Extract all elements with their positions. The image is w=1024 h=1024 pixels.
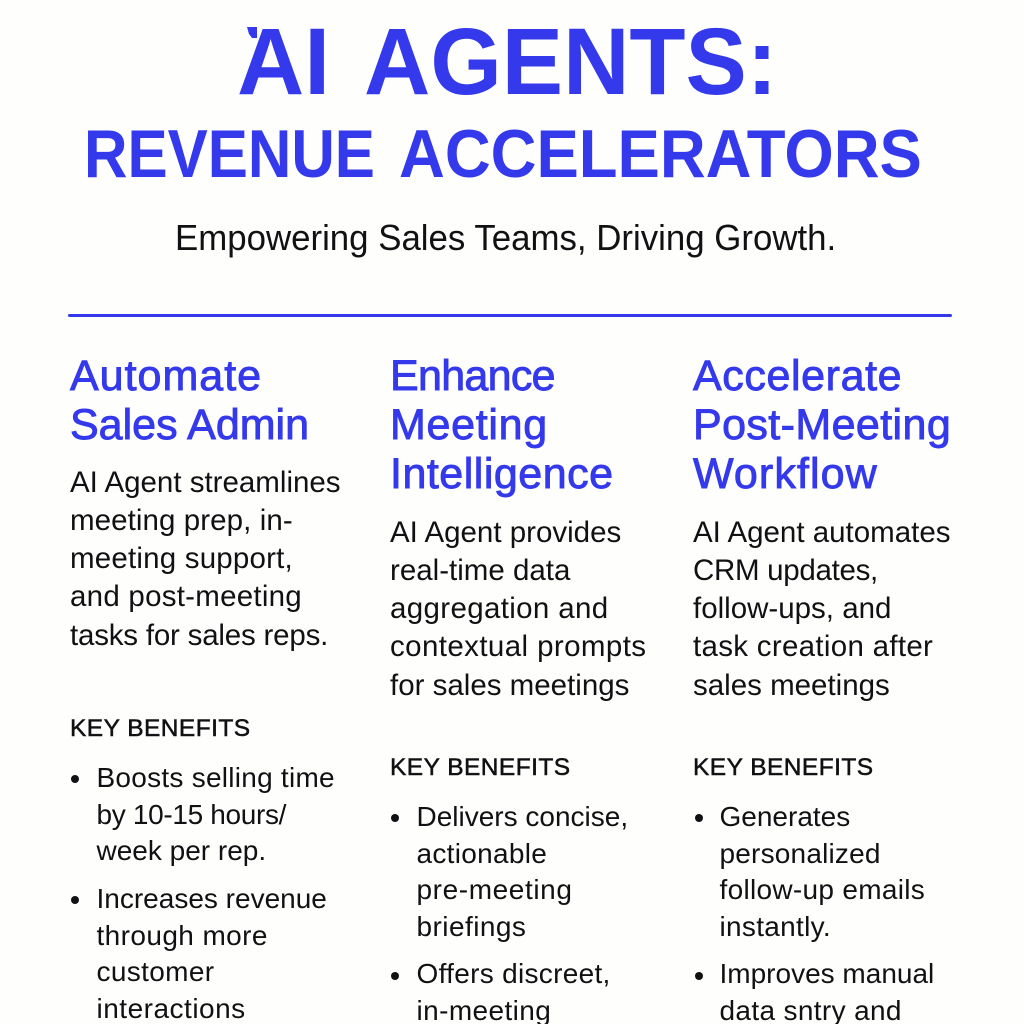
benefits list: Generates (720, 801, 850, 832)
benefits list: by 10-15 hours/ (96, 798, 286, 830)
text block: description: for sales meetings (390, 669, 629, 702)
text block: description: sales meetings (693, 669, 890, 702)
text block: description: aggregation and (390, 592, 608, 625)
benefits list: Improves manual (720, 958, 934, 989)
benefits list: follow-up emails (720, 874, 925, 905)
benefits list (695, 801, 934, 1024)
heading: automate sales admin: Automate (70, 352, 262, 400)
heading: key benefits: KEY BENEFITS (693, 754, 874, 781)
title: AI (237, 9, 330, 115)
heading: enhance meeting intelligence: Enhance (390, 352, 555, 400)
icon: accent mark on title (247, 27, 257, 38)
heading: automate sales admin (70, 352, 309, 449)
benefits list: actionable (416, 838, 547, 868)
heading: key benefits: KEY BENEFITS (70, 715, 251, 742)
text block: description: task creation after (693, 630, 933, 663)
text block: description (70, 466, 341, 652)
panel: accelerate post-meeting workflow (692, 352, 951, 1024)
heading: accelerate post-meeting workflow: Post-Meeting (693, 401, 951, 449)
title: AGENTS: (364, 9, 777, 115)
benefits list: briefings (416, 910, 526, 942)
benefits list: week per rep. (96, 835, 266, 866)
panel: automate sales admin (70, 352, 341, 1024)
benefits list: pre-meeting (416, 874, 573, 905)
benefits list: Increases revenue (96, 883, 327, 914)
text block: description: CRM updates, (693, 554, 878, 587)
text block: description: contextual prompts (390, 630, 646, 663)
text block: description: follow-ups, and (693, 592, 891, 625)
benefits list: through more (96, 920, 268, 950)
subtitle heading (84, 116, 922, 192)
divider line (68, 314, 952, 317)
subtitle heading: REVENUE (84, 116, 375, 192)
benefits list (391, 801, 628, 1024)
text block: description: meeting prep, in- (70, 504, 293, 537)
benefits list: Boosts selling time (96, 762, 335, 793)
heading: enhance meeting intelligence (390, 352, 614, 498)
heading: accelerate post-meeting workflow (692, 352, 951, 498)
benefits list: instantly. (720, 910, 831, 942)
benefits list (71, 762, 335, 1024)
benefits list: Offers discreet, (416, 958, 611, 989)
heading: accelerate post-meeting workflow: Accelerate (693, 352, 902, 400)
text block: description (693, 516, 950, 702)
panel: enhance meeting intelligence (390, 352, 646, 1024)
text block: description: and post-meeting (70, 580, 302, 613)
text block: description: AI Agent streamlines (70, 466, 341, 499)
benefits list: personalized (720, 838, 881, 868)
benefits list: interactions (96, 992, 246, 1024)
text block: description: AI Agent provides (390, 516, 621, 549)
subtitle heading: ACCELERATORS (399, 116, 922, 192)
benefits list: customer (96, 956, 214, 987)
text block: description: real-time data (390, 554, 570, 587)
text block: description: AI Agent automates (693, 516, 950, 549)
text block: description (390, 516, 646, 702)
heading: automate sales admin: Sales Admin (70, 401, 309, 449)
heading: accelerate post-meeting workflow: Workflow (693, 450, 878, 498)
benefits list: Delivers concise, (416, 801, 628, 832)
text block: description: tasks for sales reps. (70, 619, 328, 652)
text block: description: meeting support, (70, 542, 293, 575)
tagline: Empowering Sales Teams, Driving Growth. (175, 217, 836, 258)
heading: key benefits: KEY BENEFITS (390, 754, 571, 781)
heading: enhance meeting intelligence: Intelligence (390, 450, 614, 498)
heading: enhance meeting intelligence: Meeting (390, 401, 548, 449)
